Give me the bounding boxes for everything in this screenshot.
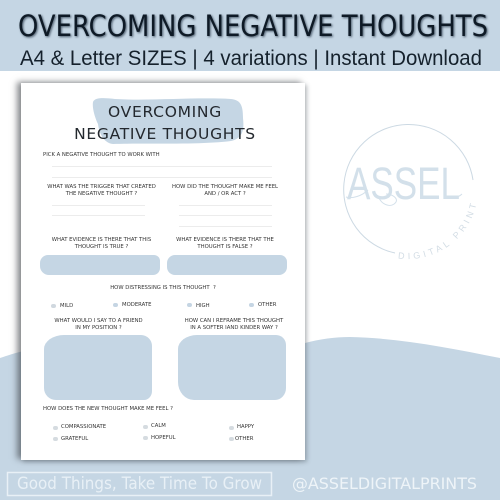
header band: [0, 0, 500, 71]
prompt: evidence true: [52, 237, 151, 250]
distress options: MODERATE: [122, 302, 151, 308]
logo wordmark: ASSEL: [347, 158, 460, 209]
prompt 1: PICK A NEGATIVE THOUGHT TO WORK WITH: [43, 152, 160, 158]
title blob: [92, 98, 244, 144]
friend box: [44, 335, 152, 400]
logo: [343, 124, 476, 259]
prompt: evidence false: WHAT EVIDENCE IS THERE THAT THE: [176, 237, 274, 243]
distress options: [51, 302, 276, 309]
prompt: reframe: [185, 318, 284, 331]
prompt: reframe: HOW CAN I REFRAME THIS THOUGHT: [185, 318, 283, 324]
prompt: friend: IN MY POSITION ?: [75, 325, 122, 331]
feeling options: HOPEFUL: [151, 435, 176, 441]
prompt: evidence true: THOUGHT IS TRUE ?: [75, 244, 128, 250]
distress options: OTHER: [258, 302, 276, 308]
prompt: evidence true: WHAT EVIDENCE IS THERE THAT THIS: [52, 237, 151, 243]
tagline box: Good Things, Take Time To Grow: [17, 474, 262, 494]
subtitle: A4 & Letter SIZES | 4 variations | Instant Download: [20, 47, 482, 70]
distress question: HOW DISTRESSING IS THIS THOUGHT ?: [110, 285, 216, 291]
prompt: trigger: THE NEGATIVE THOUGHT ?: [66, 191, 137, 197]
evidence box true: [40, 255, 160, 275]
worksheet title: OVERCOMING: [108, 103, 222, 121]
feeling options: [53, 423, 254, 442]
social handle: @ASSELDIGITALPRINTS: [292, 474, 477, 493]
worksheet paper: [21, 83, 305, 460]
feeling options: COMPASSIONATE: [61, 424, 106, 430]
prompt: friend: [54, 318, 143, 331]
footer texts: [6, 472, 477, 496]
distress options: MILD: [60, 303, 73, 309]
prompt: evidence false: THOUGHT IS FALSE ?: [197, 244, 253, 250]
prompt: trigger: WHAT WAS THE TRIGGER THAT CREATED: [47, 184, 156, 190]
prompt: reframe: IN A SOFTER IAND KINDER WAY ?: [190, 325, 278, 331]
prompt: trigger: [47, 184, 156, 197]
evidence box false: [167, 255, 287, 275]
feeling options: CALM: [151, 423, 166, 429]
prompt: friend: WHAT WOULD I SAY TO A FRIEND: [54, 318, 143, 324]
feeling options: GRATEFUL: [61, 436, 88, 442]
distress options: HIGH: [196, 303, 210, 309]
feeling options: OTHER: [235, 436, 253, 442]
prompt: evidence false: [176, 237, 274, 250]
logo tagline: DIGITAL PRINT: [398, 203, 476, 259]
prompt: feel: HOW DID THE THOUGHT MAKE ME FEEL: [172, 184, 278, 190]
prompt: feel: [172, 184, 278, 197]
feeling options: HAPPY: [237, 424, 254, 430]
feel question: HOW DOES THE NEW THOUGHT MAKE ME FEEL ?: [43, 406, 173, 412]
prompt: feel: AND / OR ACT ?: [204, 191, 246, 197]
reframe box: [178, 335, 286, 400]
worksheet title: NEGATIVE THOUGHTS: [74, 125, 256, 143]
worksheet title: [74, 103, 256, 143]
